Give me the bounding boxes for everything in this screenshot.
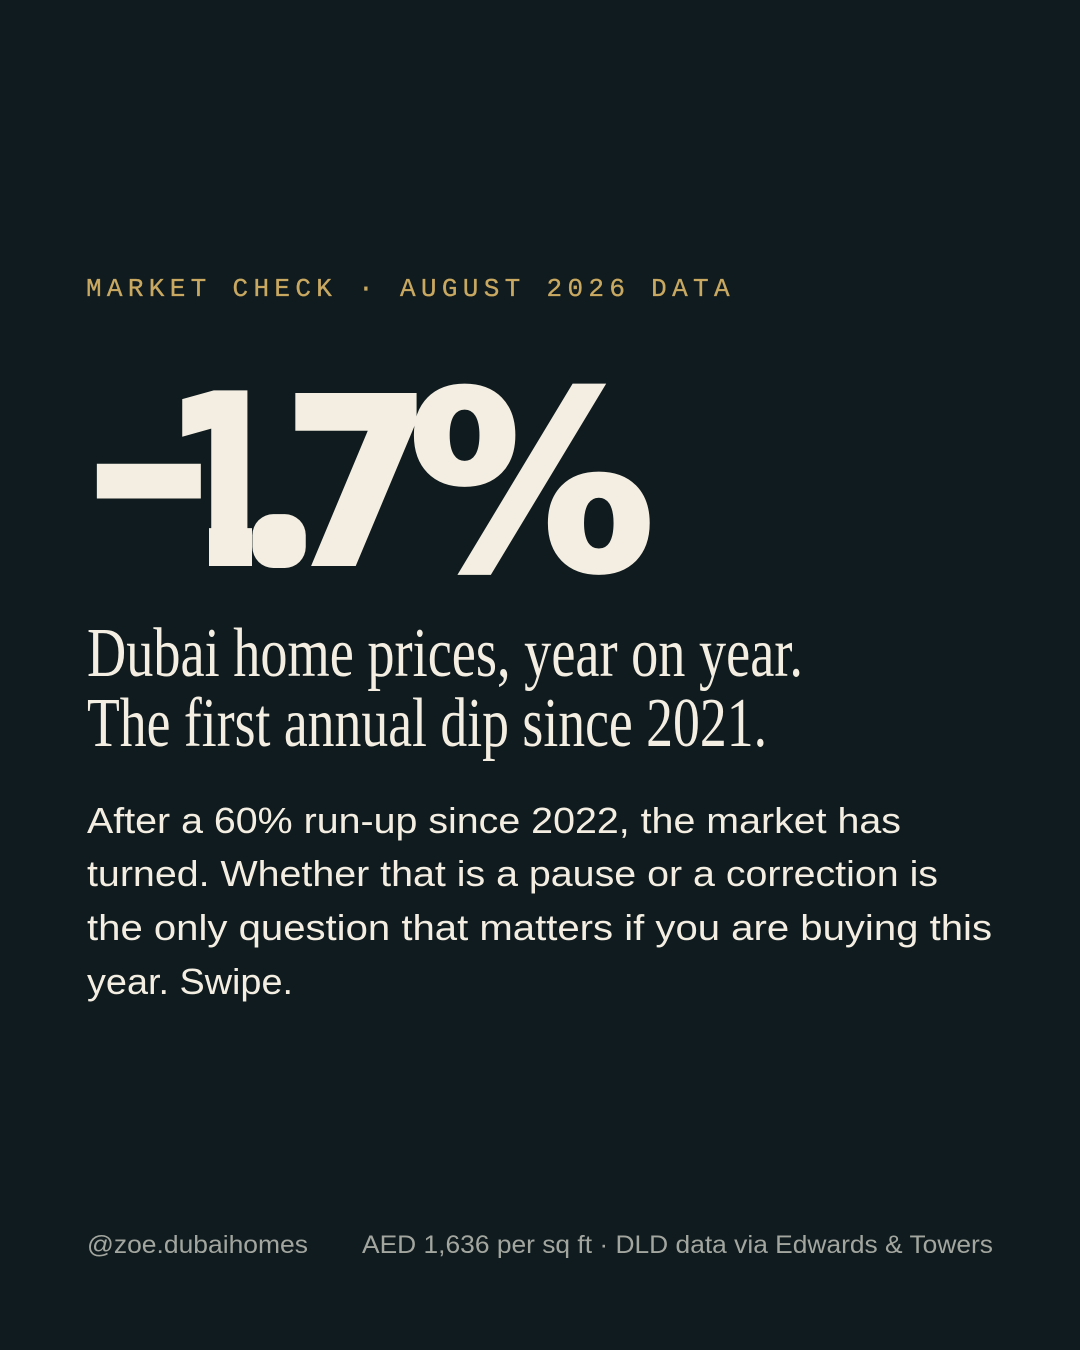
body paragraph: the only question that matters if you are buying this bbox=[87, 907, 992, 948]
body paragraph: turned. Whether that is a pause or a correction is bbox=[87, 853, 938, 894]
headline statistic: minus 1.7 percent: 7 bbox=[284, 351, 431, 617]
subheading: two lines: Dubai home prices, year on year. bbox=[87, 615, 803, 692]
headline statistic: minus 1.7 percent: 1 bbox=[166, 348, 284, 617]
eyebrow: market check date: MARKET CHECK · AUGUST 2026 DATA bbox=[86, 274, 735, 304]
headline statistic: minus 1.7 percent bbox=[90, 260, 654, 650]
subheading: two lines: The first annual dip since 2021. bbox=[87, 685, 767, 762]
subheading: two lines bbox=[87, 615, 803, 762]
headline statistic: minus 1.7 percent: % bbox=[409, 341, 654, 626]
headline statistic: minus 1.7 percent: . bbox=[268, 475, 290, 564]
headline statistic: minus 1.7 percent: – bbox=[90, 260, 207, 650]
footer: source: AED 1,636 per sq ft · DLD data via Edwards & Towers bbox=[362, 1231, 993, 1259]
body paragraph: After a 60% run-up since 2022, the market has bbox=[87, 800, 901, 841]
body paragraph: year. Swipe. bbox=[87, 961, 293, 1002]
footer: handle: @zoe.dubaihomes bbox=[87, 1231, 308, 1259]
body paragraph bbox=[87, 800, 992, 1002]
